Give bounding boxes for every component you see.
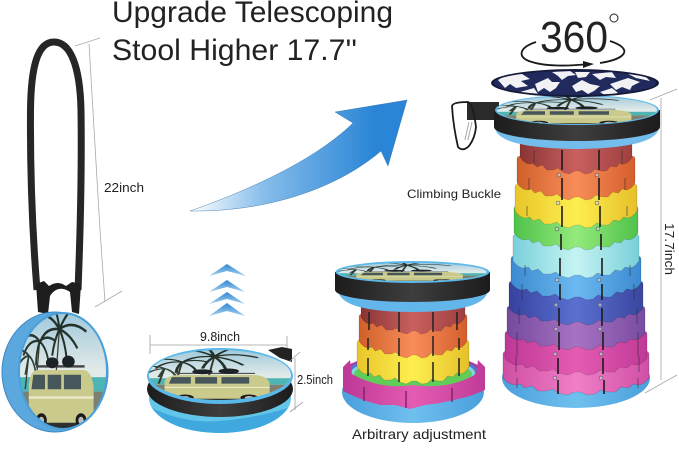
ring holes [553,173,603,380]
rotation badge: 360 degrees: 360 [540,13,608,62]
height dimension line [645,89,677,393]
orange ring [359,314,467,358]
yellow ring [357,340,469,384]
folded stool [132,329,333,433]
rotating cushion [491,69,659,97]
hanging stool with strap [2,38,122,442]
collapsed inner rings [343,354,483,390]
height dimension line [290,352,303,412]
fully extended stool [452,69,673,408]
partly extended stool [335,261,490,423]
carabiner gate [465,122,472,140]
carabiner strap [467,102,499,120]
dark red ring [361,290,465,334]
ring slits [558,150,604,394]
base wave [152,408,288,433]
pink ring clasps [364,387,452,408]
black band [147,361,293,417]
seat picture [149,350,291,400]
black band [335,272,490,302]
width dimension line [150,335,287,354]
label: Climbing Buckle: Climbing Buckle [407,187,501,201]
carabiner [452,102,476,149]
ring side slits [516,150,639,388]
rainbow rings [503,130,649,395]
blue rim [338,290,488,312]
folded base [149,363,291,433]
base [342,361,484,423]
title [112,0,393,67]
strap clip [36,281,81,314]
strap tab [268,347,292,362]
round seat picture [20,314,106,428]
seat rim [336,261,490,283]
label: 9.8inch: 9.8inch [200,329,240,344]
black band [494,110,660,141]
title: Stool Higher 17.7'' [112,34,357,67]
label: 17.7inch: 17.7inch [662,223,677,275]
label: 2.5inch: 2.5inch [297,372,333,387]
seat rim [147,348,293,404]
up chevrons [209,264,246,316]
seat picture [338,263,486,281]
pink outer ring [343,360,485,409]
seat rim [19,313,107,429]
dimension line: strap length [75,38,122,307]
curved arrow [190,100,407,211]
rotation badge: 360 degrees [522,13,624,68]
shoulder strap [30,42,81,290]
label: 22inch: 22inch [104,180,144,195]
label: Arbitrary adjustment: Arbitrary adjustment [352,426,486,442]
round folded stool side [2,312,108,432]
base [502,348,650,408]
rotation orbit arrow [522,41,624,66]
seat rim [495,95,659,125]
blue seat underside [495,128,659,149]
slits [368,312,459,382]
seat picture [497,96,657,124]
